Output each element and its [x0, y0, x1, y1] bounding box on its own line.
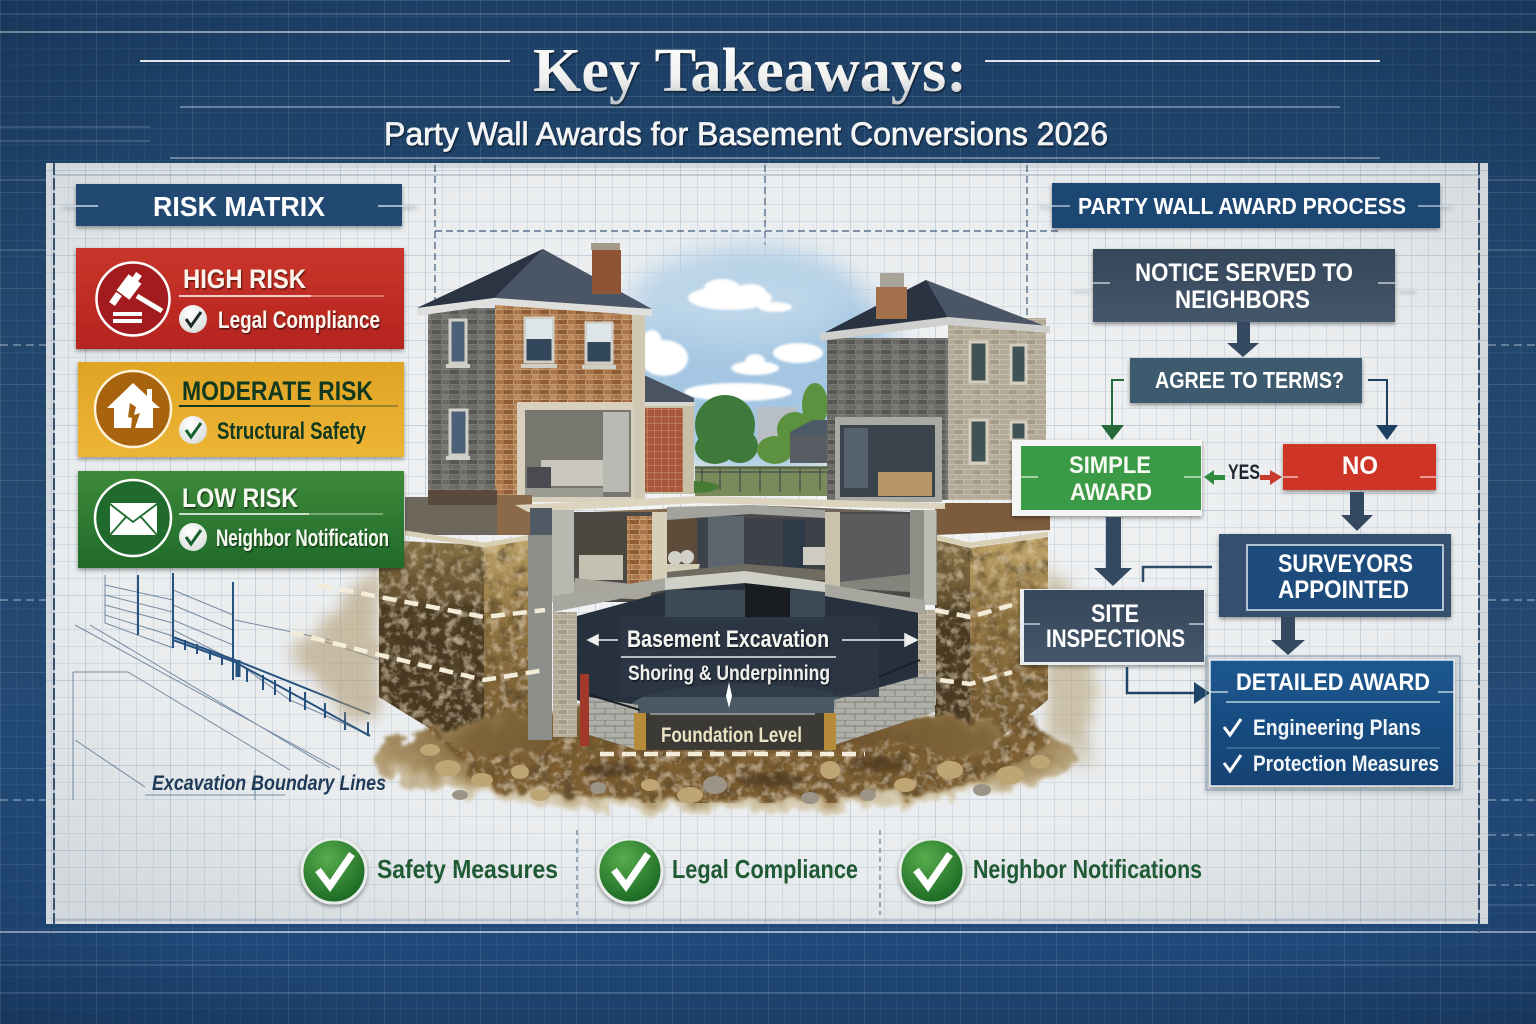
arrow: simple award to site inspections	[1094, 517, 1132, 586]
icon: damaged house	[95, 371, 171, 447]
callout: foundation level: Foundation Level	[661, 724, 802, 747]
box: surveyors appointed: APPOINTED	[1278, 576, 1409, 604]
checklist row	[302, 839, 1202, 903]
rooms level	[528, 505, 937, 740]
box: simple award: AWARD	[1070, 479, 1152, 506]
arrow: no to surveyors	[1341, 492, 1373, 531]
soil blocks	[379, 535, 1048, 762]
arrow: agree to simple award	[1101, 380, 1124, 440]
side columns	[530, 508, 552, 538]
item: safety measures: Safety Measures	[377, 854, 558, 884]
card: low risk: Neighbor Notification	[216, 525, 389, 552]
process heading: PARTY WALL AWARD PROCESS	[1078, 193, 1406, 219]
soil strata dashes	[290, 585, 1012, 754]
box: site inspections	[1020, 589, 1205, 665]
yes connector: YES	[1228, 461, 1260, 484]
label: excavation boundary lines: Excavation Boundary Lines	[152, 772, 386, 795]
risk matrix heading	[62, 184, 416, 226]
box: detailed award	[1206, 656, 1460, 790]
excavation boundary drawing	[73, 573, 380, 800]
windows	[450, 318, 612, 455]
item: legal compliance	[598, 839, 858, 903]
box: surveyors appointed: SURVEYORS	[1278, 550, 1413, 578]
box: notice served	[1073, 249, 1416, 322]
card: high risk	[76, 248, 404, 349]
card: moderate risk: MODERATE RISK	[182, 376, 373, 406]
card: low risk: LOW RISK	[182, 483, 298, 513]
roof	[417, 249, 652, 309]
card: moderate risk	[78, 362, 404, 457]
open room	[517, 402, 634, 502]
process heading	[1040, 183, 1452, 228]
card: high risk: Legal Compliance	[218, 307, 380, 334]
connector: surveyors to site	[1143, 567, 1212, 582]
arrow: surveyors to detailed award	[1271, 617, 1305, 655]
panel: party wall award process	[1012, 183, 1460, 790]
soil fade wings	[290, 560, 1095, 770]
blueprint paper panel	[46, 163, 1488, 932]
left house	[417, 243, 695, 502]
box: notice served: NOTICE SERVED TO	[1135, 259, 1353, 287]
icon: gavel	[96, 262, 170, 336]
box: agree to terms: AGREE TO TERMS?	[1155, 367, 1344, 393]
box: surveyors appointed	[1219, 534, 1451, 617]
arrow: notice to agree	[1227, 322, 1259, 357]
subtitle: Party Wall Awards for Basement Conversions 2026	[384, 116, 1108, 152]
box: no: NO	[1342, 452, 1378, 480]
icon: check	[179, 523, 207, 551]
icon: check	[179, 416, 207, 444]
arrow: agree to no	[1368, 380, 1398, 440]
sky	[625, 255, 895, 475]
loose stones	[420, 744, 1050, 804]
rubble mound	[373, 704, 1077, 812]
box: detailed award: Protection Measures	[1253, 751, 1439, 776]
box: simple award: SIMPLE	[1069, 452, 1151, 479]
box: simple award	[1012, 440, 1202, 516]
right house	[820, 273, 1050, 502]
panel: risk matrix	[62, 184, 416, 568]
box: detailed award: Engineering Plans	[1253, 715, 1421, 740]
callout: foundation level	[640, 713, 830, 750]
callout: basement excavation: Shoring & Underpinning	[628, 662, 830, 685]
card: low risk	[78, 471, 404, 568]
yes connector	[1204, 461, 1282, 485]
trees and back garden	[665, 383, 828, 496]
risk matrix heading: RISK MATRIX	[153, 191, 325, 222]
item: legal compliance: Legal Compliance	[672, 854, 858, 884]
item: safety measures	[302, 839, 558, 903]
center room	[667, 518, 825, 574]
basement excavation chamber	[553, 580, 936, 737]
callout: basement excavation	[588, 617, 917, 708]
basement slab	[553, 571, 925, 614]
box: agree to terms	[1130, 358, 1362, 403]
item: neighbor notifications	[900, 839, 1202, 903]
ground slab and base courses	[405, 490, 1050, 545]
central illustration: house cross-section	[290, 243, 1095, 812]
right room	[840, 514, 910, 586]
box: notice served: NEIGHBORS	[1175, 286, 1310, 314]
extension	[644, 375, 695, 494]
item: neighbor notifications: Neighbor Notifications	[973, 854, 1202, 884]
box: no	[1283, 444, 1436, 490]
arrow: site to detailed award	[1127, 667, 1210, 704]
box: detailed award: DETAILED AWARD	[1236, 669, 1430, 696]
box: site inspections: SITE	[1091, 600, 1139, 628]
box: site inspections: INSPECTIONS	[1046, 625, 1185, 653]
card: moderate risk: Structural Safety	[217, 418, 367, 445]
icon: check	[179, 305, 207, 333]
title: Key Takeaways:	[533, 37, 967, 105]
icon: envelope	[95, 480, 171, 556]
card: high risk: HIGH RISK	[183, 264, 306, 294]
left room	[575, 516, 627, 566]
block retaining walls	[580, 660, 935, 750]
callout: basement excavation: Basement Excavation	[627, 626, 829, 653]
chimney	[591, 243, 621, 294]
